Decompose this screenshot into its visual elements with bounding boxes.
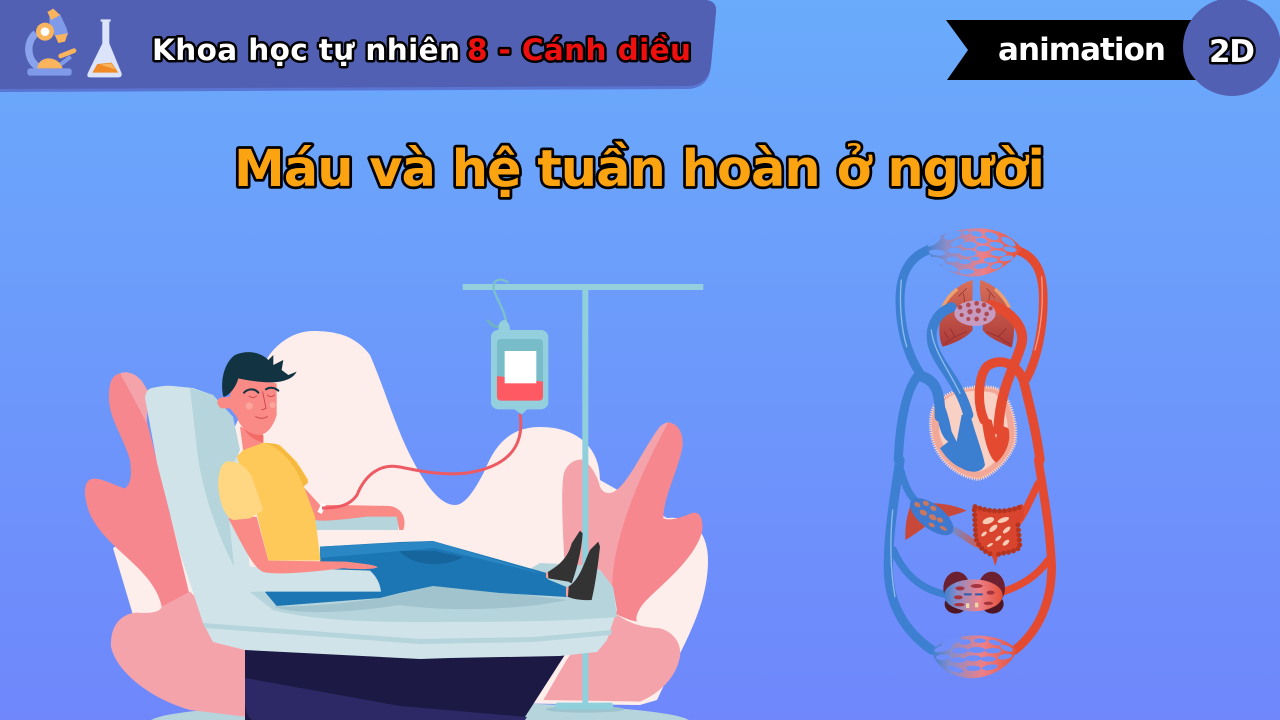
heart body bbox=[930, 387, 1016, 479]
animation ribbon badge: 2D bbox=[1209, 34, 1255, 70]
background cream blob bbox=[113, 331, 708, 705]
IV stand bbox=[463, 284, 703, 713]
blue lower vessels bbox=[888, 460, 948, 650]
wrist band bbox=[317, 503, 326, 514]
capillary network: head bbox=[925, 228, 1022, 277]
floor base ellipse bbox=[150, 702, 690, 720]
vessels: red bbox=[979, 250, 1043, 460]
upper body: brain capillaries, lungs, heart bbox=[898, 228, 1043, 479]
header text: 8 - Cánh diều bbox=[467, 33, 691, 67]
red lower vessels bbox=[950, 460, 1052, 650]
capillary network: lungs bbox=[954, 301, 996, 326]
header text: Khoa học tự nhiên bbox=[152, 33, 460, 67]
vessels: blue bbox=[898, 250, 968, 460]
intestine bbox=[974, 504, 1024, 566]
icon: microscope bbox=[27, 9, 74, 76]
blood tube bbox=[322, 414, 521, 508]
kidneys bbox=[943, 572, 1005, 614]
capillary network: lower body bbox=[932, 635, 1017, 678]
face details bbox=[244, 388, 278, 418]
blood bag bbox=[487, 280, 548, 414]
far arm bbox=[303, 487, 405, 530]
chair body bbox=[145, 386, 617, 659]
right pink leaf bbox=[543, 422, 702, 702]
head bbox=[217, 377, 277, 435]
icon: flask bbox=[87, 19, 122, 77]
hair bbox=[222, 352, 297, 397]
sleeve bbox=[218, 461, 263, 520]
near arm bbox=[228, 517, 378, 573]
heart chambers bbox=[937, 395, 1009, 472]
animation ribbon badge: animation bbox=[998, 32, 1166, 68]
illustration: blood donation scene bbox=[85, 280, 708, 720]
lower body: liver, intestine, kidneys, legs bbox=[888, 460, 1052, 678]
seat shadow bbox=[273, 586, 567, 612]
header banner bbox=[0, 0, 716, 92]
shirt bbox=[237, 443, 321, 561]
animation ribbon badge bbox=[946, 0, 1280, 96]
lungs bbox=[939, 280, 1014, 348]
title: Máu và hệ tuần hoàn ở người bbox=[234, 140, 1045, 199]
liver bbox=[904, 491, 967, 542]
left pink leaf bbox=[85, 372, 247, 717]
chair pedestal bbox=[245, 645, 568, 720]
header text bbox=[152, 33, 691, 67]
shoes bbox=[546, 531, 600, 600]
near armrest bbox=[233, 566, 381, 592]
person bbox=[217, 352, 567, 612]
jeans bbox=[265, 541, 567, 606]
illustration: circulatory system diagram bbox=[888, 228, 1052, 678]
neck bbox=[240, 427, 263, 452]
